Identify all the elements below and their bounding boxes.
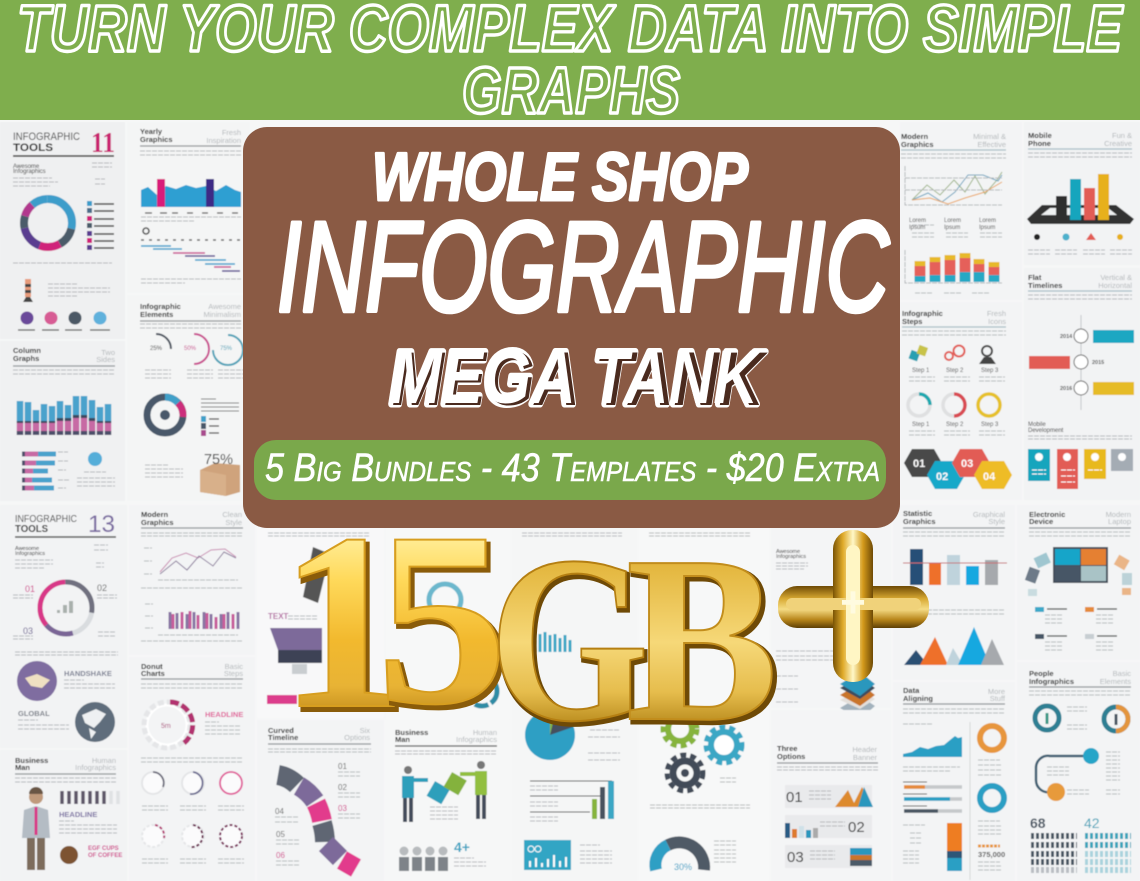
panel: bars and pie <box>512 505 637 881</box>
gear: green <box>663 712 697 746</box>
option 01: 01 <box>786 789 803 806</box>
panel: modern graphics minimal <box>900 122 1022 300</box>
panel: people infographics <box>1017 662 1140 881</box>
panel: gears <box>639 505 769 881</box>
figure: businessman <box>22 787 50 870</box>
progress bars <box>904 787 962 811</box>
side label: Modern <box>1106 510 1131 519</box>
side label two: Elements <box>1100 677 1131 686</box>
gauge 50 percent: 50% <box>184 346 197 352</box>
status circles <box>20 312 106 324</box>
heading: three: Three <box>777 744 797 753</box>
text: cups of coffee two: OF COFFEE <box>88 853 122 859</box>
timeline labels <box>275 762 360 865</box>
ring blue <box>980 786 1004 810</box>
labels lorem ipsum: Ipsum <box>909 225 925 231</box>
isometric stack <box>840 672 875 719</box>
heading: tools: TOOLS <box>15 524 48 535</box>
panel: curved timeline <box>257 720 384 881</box>
option 01 <box>785 785 873 808</box>
pictogram grid left pale <box>1031 867 1077 873</box>
legend <box>87 201 114 250</box>
heading: curved: Curved <box>268 726 294 735</box>
side label two: Icons <box>988 317 1006 326</box>
letter B: B <box>626 508 778 771</box>
heading: mobile: Mobile <box>1028 422 1046 428</box>
side label: Two <box>101 348 115 357</box>
item labels: 02 <box>97 583 107 593</box>
people ring left <box>1035 706 1059 730</box>
labels lorem ipsum: Lorem <box>909 218 926 224</box>
side label: Fresh <box>222 128 241 137</box>
hexagon steps: 03 <box>961 458 973 470</box>
headline: whole shop: WHOLE SHOP <box>372 139 749 215</box>
heading: elements: Elements <box>140 310 173 319</box>
timeline labels: 02 <box>338 783 347 792</box>
heading: steps: Steps <box>902 317 922 326</box>
donut chart <box>24 199 72 247</box>
gauge 25 percent <box>150 334 171 352</box>
option 02 <box>785 815 872 838</box>
heading: yearly: Yearly <box>140 127 163 136</box>
number eight ring: 8 <box>476 684 485 701</box>
digit 5: 5 <box>376 481 508 756</box>
labels step row one <box>912 368 999 374</box>
area chart <box>903 736 962 757</box>
headline: mega tank: MEGA TANK <box>390 335 762 420</box>
side label two: Style <box>225 518 242 527</box>
item labels: 01 <box>25 584 35 594</box>
gear: blue <box>706 727 742 763</box>
floating cards right <box>1114 555 1132 595</box>
side label two: Inspiration <box>206 136 241 145</box>
gauge 75 percent: 75% <box>220 346 233 352</box>
side label: Header <box>852 745 877 754</box>
timeline labels: 05 <box>276 830 285 839</box>
labels step row one: Step 3 <box>981 368 999 374</box>
headline: mega tank: MEGA TANK <box>392 337 768 422</box>
labels step row two: Step 1 <box>912 422 930 428</box>
subheading line two: Infographics <box>13 169 46 175</box>
text: handshake: HANDSHAKE <box>64 669 112 678</box>
timeline nodes <box>1074 329 1088 395</box>
grouped bar chart <box>170 612 238 629</box>
icon: person <box>979 346 996 364</box>
area chart <box>141 185 241 207</box>
icon: lighthouse <box>23 279 33 302</box>
icon: gears <box>945 346 964 360</box>
donut with globe <box>147 397 183 433</box>
timeline year labels <box>1060 334 1104 392</box>
semi circular gauge: 30% <box>674 862 692 872</box>
label 75 percent: 75% <box>204 451 233 468</box>
timeline labels: 03 <box>338 804 347 813</box>
panel: infographic elements <box>127 295 250 501</box>
pink button <box>267 695 297 704</box>
heading: tools: TOOLS <box>13 142 53 154</box>
heading: graphics: Graphics <box>903 517 936 526</box>
heading: infographic: Infographic <box>140 302 181 311</box>
connector nodes <box>1047 748 1099 801</box>
heading: graphics: Graphics <box>140 135 173 144</box>
labels step row two: Step 3 <box>981 422 999 428</box>
development cards <box>1028 449 1133 489</box>
option 03: 03 <box>787 849 804 866</box>
heading: business: Business <box>15 756 48 765</box>
heading: charts: Charts <box>141 669 165 678</box>
bar columns <box>1056 174 1109 220</box>
timeline year labels: 2015 <box>1092 360 1104 366</box>
side label: Basic <box>225 662 243 671</box>
icon: laptop <box>270 628 322 674</box>
panel: statistic graphics <box>893 505 1015 680</box>
line chart <box>160 549 236 574</box>
timeline axis <box>1080 315 1082 410</box>
line chart <box>912 172 1002 204</box>
heading: infographics: Infographics <box>1029 677 1074 686</box>
panel: brown promo card <box>243 127 900 528</box>
item labels: 03 <box>23 626 33 636</box>
subheading: Awesome <box>13 164 40 170</box>
triangle chart <box>904 627 1004 665</box>
number 11: 11 <box>91 127 115 159</box>
side label two: Minimalism <box>204 310 241 319</box>
heading: people: People <box>1029 669 1054 678</box>
icon: cardboard box <box>200 463 240 496</box>
panel: infographic tools 11 <box>0 122 125 339</box>
people ring right <box>1104 707 1128 731</box>
bar callouts <box>530 781 614 821</box>
timeline year labels: 2016 <box>1060 386 1072 392</box>
side label: Human <box>473 728 497 737</box>
curved connector <box>1036 756 1088 792</box>
hexagon steps: 01 <box>913 458 925 470</box>
gauge 50 percent <box>184 334 209 364</box>
badge: bundle details <box>254 440 886 500</box>
side label two: Effective <box>977 140 1006 149</box>
heading: modern: Modern <box>901 132 928 141</box>
panel: business man human infographics <box>386 722 510 881</box>
panel: column graphs <box>0 341 125 501</box>
pictogram row <box>62 791 104 804</box>
side label: Human <box>92 756 116 765</box>
pie chart <box>525 710 575 760</box>
plus sign <box>778 530 929 682</box>
panel: infographic tools 13 <box>0 505 127 748</box>
pictogram grid left <box>1031 836 1077 862</box>
side label: Graphical <box>973 510 1005 519</box>
horizontal bar chart <box>22 454 56 488</box>
stars row <box>978 844 1000 848</box>
side label: Vertical & <box>1100 273 1132 282</box>
icon: blue circle <box>88 452 102 466</box>
gauge 75 percent <box>213 335 243 365</box>
floating cards left <box>1025 553 1051 596</box>
digit 1: 1 <box>279 481 407 761</box>
text: 4 plus: 4+ <box>454 839 470 855</box>
side label two: Options <box>344 733 370 742</box>
number 13: 13 <box>88 511 115 538</box>
stacked column chart <box>920 253 994 282</box>
small donut figure <box>429 584 461 616</box>
icon: puzzle <box>909 345 928 361</box>
labels step row two <box>912 422 999 428</box>
side label: Clean <box>222 510 242 519</box>
labels step row two: Step 2 <box>946 422 964 428</box>
stacked column chart <box>20 396 108 435</box>
heading: development: Development <box>1028 428 1064 434</box>
panel: tools stack <box>771 505 891 719</box>
curved segments <box>278 775 356 868</box>
dashed donut <box>144 702 193 748</box>
pictogram people <box>399 846 448 871</box>
header band <box>0 0 1140 120</box>
side label: Awesome <box>208 302 241 311</box>
heading: infographic: INFOGRAPHIC <box>15 514 77 525</box>
labels lorem ipsum <box>909 218 996 231</box>
side label two: Laptop <box>1108 517 1131 526</box>
labels lorem ipsum: Ipsum <box>979 225 995 231</box>
letter G: G <box>491 511 651 774</box>
heading: graphs: Graphs <box>13 354 39 363</box>
feature icons <box>1034 233 1123 240</box>
side label two: Banner <box>853 753 877 762</box>
badge text: 5 Big Bundles - 43 Templates - $20 Extra <box>265 446 880 490</box>
panel: infographic steps <box>900 302 1022 500</box>
hexagon steps: 04 <box>983 471 996 483</box>
labels step row one: Step 2 <box>946 368 964 374</box>
headline: mega tank: MEGA TANK <box>390 336 766 421</box>
heading: awesome: Awesome <box>776 549 800 555</box>
heading: man: Man <box>395 735 410 744</box>
letter G: G <box>489 508 649 771</box>
number eight ring <box>467 676 497 706</box>
timeline year labels: 2014 <box>1060 334 1073 340</box>
text: global: GLOBAL <box>18 709 50 718</box>
highlighted columns <box>157 179 214 207</box>
value 42: 42 <box>1084 815 1100 831</box>
icon: coffee <box>60 846 78 864</box>
text: text label: TEXT <box>268 612 289 621</box>
semi circular gauge <box>655 842 704 872</box>
side label two: Steps <box>224 669 243 678</box>
mini bars icon <box>57 601 73 613</box>
pictogram grid right pale <box>1085 854 1131 870</box>
text: headline: HEADLINE <box>59 810 97 819</box>
hexagon steps <box>904 449 1012 489</box>
heading: electronic: Electronic <box>1029 510 1065 519</box>
headline: infographic: INFOGRAPHIC <box>277 196 890 339</box>
title: line two: GRAPHS <box>462 53 680 127</box>
plus glyph: + <box>840 578 866 627</box>
item labels <box>13 583 117 639</box>
option 02: 02 <box>848 819 865 836</box>
panel: mobile phone <box>1024 122 1140 265</box>
side label two: Horizontal <box>1098 281 1132 290</box>
side label: Fun & <box>1112 131 1132 140</box>
subheading: Awesome <box>15 546 39 552</box>
stacked column <box>947 823 962 871</box>
side label: Basic <box>1113 669 1131 678</box>
icon: phone <box>303 547 330 603</box>
panel: yearly graphics <box>127 122 250 293</box>
pale pictograms <box>111 791 118 804</box>
small column chart <box>535 632 570 652</box>
puzzle pieces <box>427 772 467 804</box>
heading: business: Business <box>395 728 428 737</box>
figure: right man <box>460 761 487 819</box>
digit 1: 1 <box>282 485 410 765</box>
digit 5: 5 <box>379 485 511 760</box>
heading: phone: Phone <box>1028 139 1051 148</box>
side label two: Infographics <box>456 735 497 744</box>
heading: man: Man <box>15 763 30 772</box>
text: headline: HEADLINE <box>205 710 243 719</box>
mini legend <box>201 416 219 436</box>
heading: data: Data <box>903 686 920 695</box>
side label two: Style <box>988 517 1005 526</box>
timeline labels: 06 <box>276 851 285 860</box>
ring orange <box>980 726 1004 750</box>
panel: business man <box>0 750 127 881</box>
heading: donut: Donut <box>141 662 163 671</box>
heading: timeline: Timeline <box>268 733 298 742</box>
gauge 25 percent: 25% <box>150 346 163 352</box>
panel: three options <box>771 710 891 881</box>
headline: gold 15GB plus <box>279 481 929 774</box>
side label: Six <box>360 726 370 735</box>
heading: infographics: Infographics <box>776 554 806 560</box>
text: cups of coffee: EGF CUPS <box>88 846 119 852</box>
side label two: Sides <box>96 355 115 364</box>
hexagon steps: 02 <box>936 471 948 483</box>
timeline callouts <box>1029 330 1134 395</box>
labels step row one: Step 1 <box>912 368 930 374</box>
small donut row two <box>142 825 242 847</box>
bar chart <box>910 549 998 585</box>
panel: data aligning <box>893 682 1015 881</box>
heading: options: Options <box>777 752 805 761</box>
side label: Minimal & <box>973 132 1006 141</box>
labels lorem ipsum: Lorem <box>979 218 996 224</box>
figure: left man <box>402 766 428 822</box>
icon: handshake <box>17 661 57 701</box>
heading: timelines: Timelines <box>1028 281 1062 290</box>
side label: Fresh <box>987 309 1006 318</box>
heading: flat: Flat <box>1028 273 1042 282</box>
laptop illustration <box>1053 547 1108 583</box>
side label two: Creative <box>1104 139 1132 148</box>
pink bars <box>173 611 233 629</box>
dashed donut: 5m <box>161 723 171 730</box>
side label two: Infographics <box>75 763 116 772</box>
timeline labels: 04 <box>275 807 284 816</box>
labels lorem ipsum: Ipsum <box>944 225 960 231</box>
small donut row one <box>142 772 242 794</box>
teal box chart <box>524 840 571 870</box>
subheading two: Infographics <box>15 551 45 557</box>
progress rings <box>908 394 1000 416</box>
heading: device: Device <box>1029 517 1053 526</box>
panel: flat timelines <box>1024 268 1140 500</box>
side label: More <box>988 687 1005 696</box>
heading: column: Column <box>13 346 41 355</box>
heading: modern: Modern <box>141 510 168 519</box>
phone chart base <box>1027 205 1134 224</box>
heading: mobile: Mobile <box>1028 131 1052 140</box>
panel: electronic device <box>1017 505 1140 660</box>
panel: donut charts <box>129 657 255 881</box>
heading: infographic: Infographic <box>902 309 943 318</box>
gear: dark <box>667 755 703 791</box>
icon: globe <box>75 702 115 742</box>
panel: tools 14 partly hidden <box>386 505 510 720</box>
feature list <box>1035 607 1117 650</box>
panel: modern graphics clean <box>129 505 255 655</box>
timeline labels: 01 <box>338 762 347 771</box>
phone screen <box>1041 208 1117 215</box>
pictogram grid right <box>1085 836 1131 845</box>
heading: aligning: Aligning <box>903 694 933 703</box>
gantt chart <box>141 228 241 271</box>
heading: statistic: Statistic <box>903 509 932 518</box>
heading: graphics: Graphics <box>141 518 174 527</box>
heading: infographic tools: INFOGRAPHIC <box>13 131 80 143</box>
value 375,000: 375,000 <box>978 850 1005 859</box>
option 03 <box>785 845 872 868</box>
panel: laptop text <box>257 505 384 718</box>
side label two: Stuff <box>990 694 1006 703</box>
value 68: 68 <box>1030 815 1046 831</box>
heading: graphics: Graphics <box>901 140 934 149</box>
ring chart <box>40 582 92 634</box>
labels lorem ipsum: Lorem <box>944 218 961 224</box>
letter B: B <box>629 511 781 774</box>
